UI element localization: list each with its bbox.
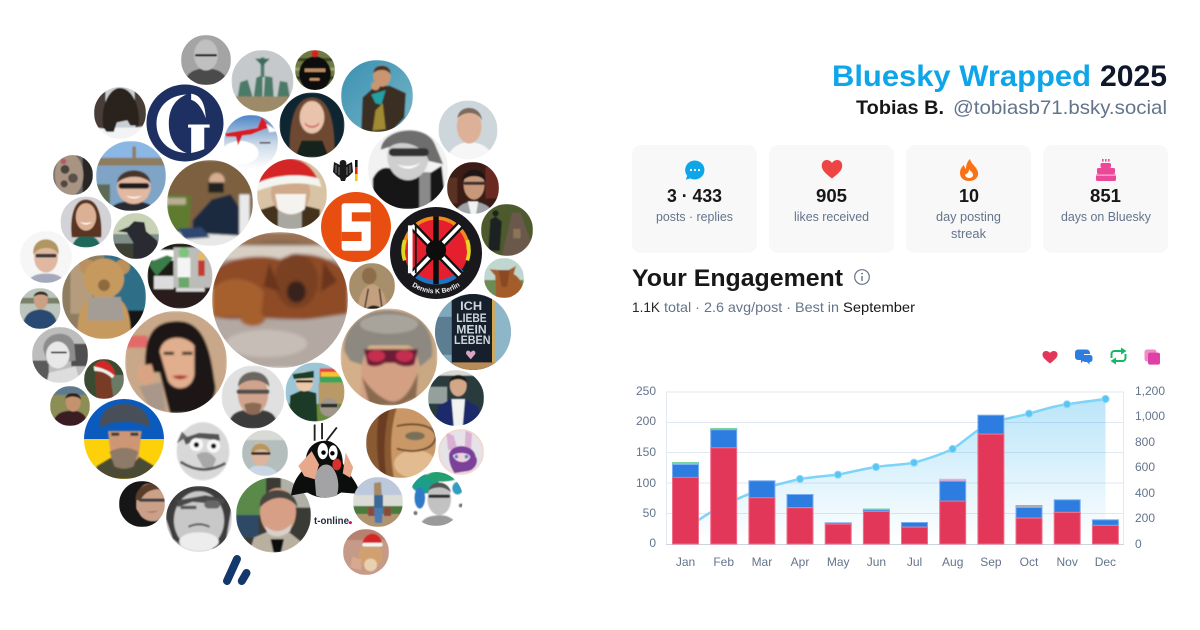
chart legend icons — [1042, 348, 1160, 365]
avatar: woman glasses by the sea — [242, 430, 288, 476]
avatar: smiling man — [236, 478, 311, 552]
avatar: woman outdoors — [353, 477, 403, 527]
engagement summary — [632, 299, 915, 315]
avatar: Dennis K Berlin badge: Dennis K Berlin — [412, 282, 460, 294]
logo: t-online: t-online — [314, 515, 349, 527]
panel: likes received: 905 — [816, 186, 847, 206]
icon: chat bubble — [685, 160, 704, 180]
month labels: Feb — [713, 555, 734, 569]
cumulative line — [686, 399, 1106, 528]
avatar: woman black hair — [125, 311, 227, 413]
avatar: man in grey wig and red glasses — [340, 308, 438, 406]
month labels: Sep — [980, 555, 1002, 569]
icon: federal eagle and flag — [333, 160, 358, 181]
user name and handle: Tobias B. — [856, 97, 944, 119]
user name and handle: @tobiasb71.bsky.social — [953, 97, 1167, 119]
panel: posts and replies — [632, 145, 757, 253]
right axis labels: 1,200 — [1135, 384, 1165, 398]
avatar: ICH LIEBE MEIN LEBEN poster: LIEBE — [456, 311, 487, 325]
avatar: man sitting — [50, 386, 90, 426]
title: Bluesky Wrapped — [832, 60, 1091, 93]
avatar: ICH LIEBE MEIN LEBEN poster: LEBEN — [454, 333, 490, 347]
left axis labels: 150 — [636, 445, 656, 459]
avatar: brandenburg gate — [232, 50, 294, 112]
left axis labels: 0 — [649, 536, 656, 550]
panel: day posting streak: day posting — [936, 210, 1001, 224]
avatar: marilyn sketch — [32, 327, 88, 383]
avatar: grey sketch man — [181, 35, 231, 85]
engagement summary: September — [843, 299, 915, 315]
avatar: woman dark background — [280, 92, 344, 158]
left axis labels: 250 — [636, 384, 656, 398]
avatar: man in suit on blue — [341, 60, 413, 132]
avatar: bald man white shirt — [438, 100, 498, 160]
avatar: teddy bear — [62, 255, 146, 339]
month labels: Apr — [791, 555, 809, 569]
icon: legend reposts — [1110, 348, 1126, 364]
month labels: Mar — [752, 555, 772, 569]
right axis labels: 600 — [1135, 460, 1155, 474]
avatar: orange S logo — [321, 192, 391, 262]
avatar: woman from behind — [349, 263, 395, 309]
icon: legend quotes — [1144, 350, 1160, 365]
right axis labels: 0 — [1135, 537, 1142, 551]
left axis labels: 50 — [643, 506, 656, 520]
panel: days on Bluesky: 851 — [1090, 186, 1121, 206]
avatar: man blue hoodie — [20, 288, 60, 329]
avatar: photographer — [167, 160, 253, 246]
engagement summary: total · 2.6 avg/post · Best in — [664, 299, 839, 315]
avatar: bison in snow — [94, 87, 146, 139]
avatar: eye close-up — [366, 408, 436, 478]
month labels: May — [827, 555, 850, 569]
avatar: man sketch with virus splash — [409, 471, 463, 526]
avatar: balaclava — [295, 50, 335, 92]
icon: cake — [1096, 159, 1116, 181]
panel: day posting streak — [906, 145, 1031, 253]
left axis labels: 200 — [636, 414, 656, 428]
icon: legend heart — [1042, 351, 1058, 364]
icon: legend replies — [1075, 350, 1092, 364]
avatar: woman brown hair — [60, 196, 112, 248]
stacked bars — [672, 415, 1118, 544]
right axis labels: 200 — [1135, 511, 1155, 525]
left axis labels: 100 — [636, 476, 656, 490]
avatar: man with books — [447, 162, 499, 214]
avatar: ICH LIEBE MEIN LEBEN poster: ICH — [460, 299, 482, 313]
month labels: Aug — [942, 555, 963, 569]
panel: likes received — [769, 145, 894, 253]
avatar: rainbow illustration — [286, 362, 344, 422]
avatar: black and white woman — [368, 129, 448, 209]
month labels: Oct — [1020, 555, 1039, 569]
avatar: crow — [113, 213, 159, 259]
avatar: ukraine man with cap — [84, 399, 164, 479]
avatar: purple bunny — [438, 429, 484, 475]
month labels — [676, 555, 1116, 569]
right axis labels: 800 — [1135, 435, 1155, 449]
cumulative points — [796, 395, 1109, 483]
avatar: muppet sketch — [176, 422, 230, 481]
avatar: red plane — [224, 115, 278, 165]
right axis labels: 1,000 — [1135, 409, 1165, 423]
left axis labels — [636, 384, 656, 550]
heading: your engagement: Your Engagement — [632, 265, 843, 292]
panel: posts and replies: 3 · 433 — [667, 186, 722, 206]
engagement summary: 1.1K — [632, 299, 661, 315]
avatar: person on path — [481, 204, 533, 256]
panel: day posting streak: streak — [951, 227, 987, 241]
right axis labels — [1135, 384, 1165, 551]
avatar: santa hat mask — [256, 159, 327, 229]
avatar: blond man glasses — [20, 231, 72, 283]
avatar cloud — [20, 35, 533, 585]
avatar: old man black and white — [166, 486, 232, 552]
icon: flame — [960, 159, 978, 181]
month labels: Nov — [1057, 555, 1078, 569]
avatar: man london — [96, 141, 166, 211]
avatar: hamster with santa hat — [343, 529, 389, 575]
avatar: man half in dark — [119, 481, 165, 527]
avatar: ICH LIEBE MEIN LEBEN poster: MEIN — [456, 323, 487, 337]
panel: likes received: likes received — [794, 210, 869, 224]
panel: posts and replies: posts · replies — [656, 210, 733, 224]
avatar: cartoon mole — [288, 423, 362, 498]
icon: info — [855, 270, 869, 284]
avatar: man glasses grey background — [222, 366, 284, 428]
panel: day posting streak: 10 — [959, 186, 979, 206]
panel: days on Bluesky: days on Bluesky — [1061, 210, 1152, 224]
cumulative area — [686, 399, 1106, 544]
avatar: highland cow — [484, 258, 524, 298]
avatar: ICH LIEBE MEIN LEBEN poster — [435, 294, 511, 370]
month labels: Jan — [676, 555, 695, 569]
right axis labels: 400 — [1135, 486, 1155, 500]
avatar: santa hat red hair — [84, 359, 124, 399]
chart: monthly engagement — [636, 384, 1165, 569]
month labels: Jul — [907, 555, 922, 569]
month labels: Jun — [867, 555, 886, 569]
user name and handle — [856, 97, 1167, 119]
title: 2025 — [1100, 60, 1167, 93]
avatar: man in navy suit — [428, 370, 484, 426]
avatar: Dennis K Berlin badge — [390, 207, 482, 299]
panel: days on Bluesky — [1043, 145, 1168, 253]
logo: blue bars — [227, 559, 246, 581]
month labels: Dec — [1095, 555, 1116, 569]
avatar: tattoo arm — [53, 153, 93, 197]
avatar: brown puppy (large) — [212, 232, 348, 368]
icon: heart — [822, 160, 842, 178]
avatar: playmobil figures — [148, 244, 212, 308]
avatar: G logo — [146, 84, 224, 162]
